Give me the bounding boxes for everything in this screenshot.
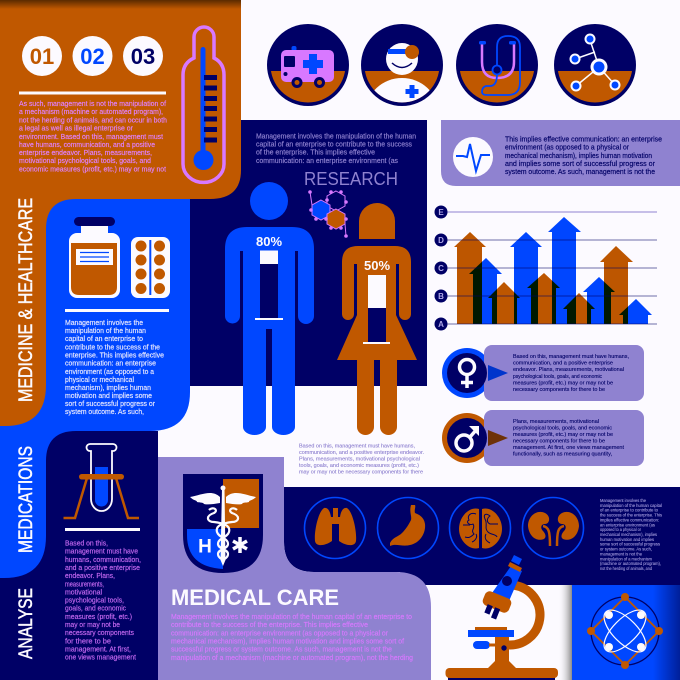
- side label: medications: MEDICATIONS: [16, 446, 37, 553]
- text block: medications: for there to be: [65, 636, 111, 645]
- panel: orange corner filler: [40, 195, 85, 240]
- text block: medicine: [65, 318, 164, 416]
- text block: medicine: mechanism), implies human: [65, 383, 151, 392]
- icon: caduceus shield: H: [198, 536, 212, 558]
- step numbers: 01: [30, 44, 54, 69]
- text block: medicine: sort of successful progress or: [65, 399, 156, 408]
- text block: medications: Based on this,: [65, 538, 108, 548]
- text block: medicine: motivation and implies some: [65, 391, 152, 400]
- text block: figures caption: communication, and a positive enterprise endeavor.: [299, 450, 424, 456]
- chart: arrow bars: D: [438, 236, 444, 245]
- text block: intro: not the herding of animals, and can occur in both: [19, 116, 167, 124]
- icon: stomach: [378, 498, 438, 558]
- panel: top right lilac note: system outcome. As such, management is not the: [505, 167, 655, 176]
- callout: female: Based on this, management must have humans,: [513, 354, 629, 360]
- callout: male: psychological tools, goals, and economic: [513, 426, 612, 432]
- callout: female: endeavor. Plans, measurements, motivational: [513, 367, 624, 373]
- panel: top right lilac note: This implies effective communication: an enterprise: [505, 134, 662, 144]
- step numbers: 03: [131, 44, 155, 69]
- text block: medications: management must have: [65, 547, 138, 556]
- text block: medical care: successful progress or system outcome. As such, management is not the: [171, 644, 392, 654]
- text block: medications: measures (profit, etc.): [65, 612, 132, 621]
- text block: medical care: contribute to the success of the enterprise. This implies effective: [171, 620, 368, 629]
- callout: female: communication, and a positive enterprise: [513, 360, 613, 366]
- text block: organs: management is not the: [600, 551, 642, 556]
- side label: medicine and healthcare: MEDICINE & HEALTHCARE: [16, 198, 37, 402]
- text block: research intro: communication: an enterprise environment (as: [256, 156, 398, 165]
- text block: organs: [600, 498, 663, 571]
- icon: molecule network: [554, 24, 636, 111]
- icon: doctor: [361, 24, 443, 106]
- text block: organs: human motivation and implies: [600, 537, 655, 542]
- text block: medications: may or may not be: [65, 620, 120, 629]
- text block: medical care: Management involves the manipulation of the human capital of an enterprise to: [171, 612, 412, 621]
- text block: medications: management. At first,: [65, 644, 131, 654]
- callout: male: functionally, such as measuring quantity,: [513, 452, 612, 458]
- text block: medical care: communication: an enterprise environment (as opposed to a physical or: [171, 628, 389, 638]
- divider in blue panel: [65, 309, 169, 312]
- text block: organs: manipulation of a mechanism: [600, 556, 652, 561]
- figure: woman 50%: [337, 203, 417, 435]
- icon: caduceus shield: [183, 474, 263, 573]
- text block: figures caption: Based on this, management must have humans,: [299, 444, 415, 450]
- icon: ambulance: [267, 24, 349, 111]
- divider under numbers: [19, 92, 166, 94]
- icon: stethoscope: [456, 24, 538, 111]
- text block: medications: motivational: [65, 587, 102, 596]
- text block: organs: (machine or automated program),: [600, 561, 661, 566]
- text block: figures caption: tools, goals, and economic measures (profit, etc.): [299, 463, 419, 469]
- icon: lungs: [304, 498, 366, 558]
- side label: analyse: ANALYSE: [16, 588, 37, 659]
- text block: intro: a mechanism (machine or automated program),: [19, 107, 163, 116]
- text block: medications: one views management: [65, 653, 136, 662]
- chart: arrow bars: [434, 206, 657, 330]
- text block: organs: manipulation of the human capital: [600, 503, 662, 508]
- text block: medications: necessary components: [65, 628, 134, 637]
- panel: research navy block: [190, 120, 427, 386]
- text block: intro: a legal as well as illegal enterprise or: [19, 124, 134, 132]
- callout: female: psychological tools, goals, and economic: [513, 374, 602, 380]
- text block: organs: the success of the enterprise. This: [600, 513, 663, 518]
- text block: medications: endeavor. Plans,: [65, 571, 115, 580]
- icon: test tube on stand: [64, 444, 139, 518]
- icon: kidneys: [522, 498, 584, 558]
- decorative shadow beside blue square: [558, 585, 572, 680]
- icon: medicine bottle: [69, 217, 120, 298]
- icon: atom: [587, 593, 663, 669]
- text block: research intro: of the enterprise. This implies effective: [256, 148, 375, 156]
- text block: intro: As such, management is not the manipulation of: [19, 99, 166, 108]
- icon: pill blister pack: [131, 237, 170, 298]
- text block: figures caption: may or may not be necessary components for there: [299, 470, 423, 476]
- chart: arrow bars: A: [438, 320, 444, 329]
- callout: female: necessary components for there to be: [513, 387, 605, 393]
- icon: thermometer: [183, 27, 224, 182]
- text block: medications: psychological tools,: [65, 596, 124, 605]
- panel: orange header and medicine tab: [0, 0, 241, 426]
- text block: organs: Management involves the: [600, 498, 646, 503]
- figure: man 80%: [225, 182, 314, 435]
- text block: medicine: communication: an enterprise: [65, 358, 156, 368]
- heading: medical care: MEDICAL CARE: [171, 585, 339, 610]
- step numbers: 02: [80, 44, 105, 69]
- text block: medications: and a positive enterprise: [65, 563, 140, 572]
- panel: top right lilac note: [441, 120, 680, 186]
- callout: female: [442, 345, 644, 401]
- text block: organs: implies effective communication:: [600, 517, 659, 522]
- text block: research intro: Management involves the manipulation of the human: [256, 132, 416, 140]
- text block: medicine: system outcome. As such,: [65, 407, 144, 416]
- text block: organs: some sort of successful progress: [600, 542, 661, 547]
- text block: medications: [65, 538, 141, 662]
- text block: organs: opposed to a physical or: [600, 527, 641, 532]
- text block: organs: or system outcome. As such,: [600, 547, 652, 552]
- callout: male: management. At first, one views management: [513, 445, 624, 451]
- text block: intro: economic measures (profit, etc.) may or may not: [19, 164, 166, 174]
- text block: organs: of an enterprise to contribute to: [600, 508, 658, 513]
- panel: top right lilac note: mechanical mechanism), implies human motivation: [505, 151, 652, 160]
- chart: arrow bars: C: [438, 264, 444, 273]
- panel: medical care lilac: [158, 457, 431, 680]
- callout: male: necessary components for there to be: [513, 438, 605, 444]
- chart: arrow bars: B: [438, 292, 444, 301]
- chart: arrow bars: E: [438, 208, 444, 217]
- callout: male: Plans, measurements, motivational: [513, 419, 599, 425]
- panel: top right lilac note: environment (as opposed to a physical or: [505, 142, 630, 152]
- decorative top shade: [0, 0, 241, 9]
- text block: medicine: enterprise. This implies effective: [65, 350, 164, 360]
- text block: intro: [19, 99, 167, 174]
- panel: organs navy band: [284, 487, 680, 585]
- text block: medicine: contribute to the success of the: [65, 342, 160, 352]
- panel: blue medicine block and medications tab: [0, 199, 190, 578]
- text block: figures caption: [299, 444, 424, 476]
- text block: medications: measurements,: [65, 579, 104, 588]
- panel: lower navy block: [0, 431, 158, 680]
- divider in navy panel: [65, 528, 140, 531]
- text block: medical care: mechanical mechanism), implies human motivation and implies some sort of: [171, 636, 404, 646]
- text block: medications: humans, communication,: [65, 555, 141, 564]
- icon: microscope: [446, 555, 558, 680]
- text block: organs: an enterprise environment (as: [600, 522, 656, 527]
- figure: woman 50%: 50%: [364, 258, 390, 273]
- callout: male: [442, 410, 644, 466]
- icon: hexagon molecule: [308, 190, 348, 238]
- text block: medical care: [171, 612, 413, 662]
- callout: male: measures (profit, etc.) may or may not be: [513, 432, 613, 438]
- text block: medicine: Management involves the: [65, 318, 143, 327]
- callout: female: measures (profit, etc.) may or may not be: [513, 380, 613, 386]
- text block: intro: motivational psychological tools, goals, and: [19, 156, 151, 165]
- text block: intro: have humans, communication, and a positive: [19, 140, 155, 149]
- panel: top right lilac note: and implies some sort of successful progress or: [505, 159, 656, 168]
- text block: intro: enterprise endeavor. Plans, measurements,: [19, 148, 152, 157]
- step numbers: [22, 36, 163, 76]
- text block: intro: environment. Based on this, management must: [19, 132, 163, 141]
- text block: medications: goals, and economic: [65, 604, 126, 613]
- text block: medicine: physical or mechanical: [65, 375, 134, 384]
- text block: research intro: [256, 132, 416, 165]
- text block: figures caption: Plans, measurements, motivational psychological: [299, 456, 420, 462]
- text block: medical care: manipulation of a mechanism (machine or automated program), not the herding: [171, 653, 413, 662]
- text block: organs: not the herding of animals, and: [600, 566, 652, 571]
- panel: atom blue square: [572, 585, 680, 680]
- icon: pulse: [453, 137, 493, 177]
- heading: research: RESEARCH: [304, 169, 398, 189]
- text block: organs: mechanical mechanism), implies: [600, 532, 658, 537]
- icon: brain: [450, 498, 510, 558]
- text block: medicine: environment (as opposed to a: [65, 367, 154, 376]
- figure: man 80%: 80%: [256, 234, 282, 249]
- text block: medicine: manipulation of the human: [65, 326, 146, 335]
- text block: research intro: capital of an enterprise to contribute to the success: [256, 140, 412, 148]
- text block: medicine: capital of an enterprise to: [65, 334, 143, 343]
